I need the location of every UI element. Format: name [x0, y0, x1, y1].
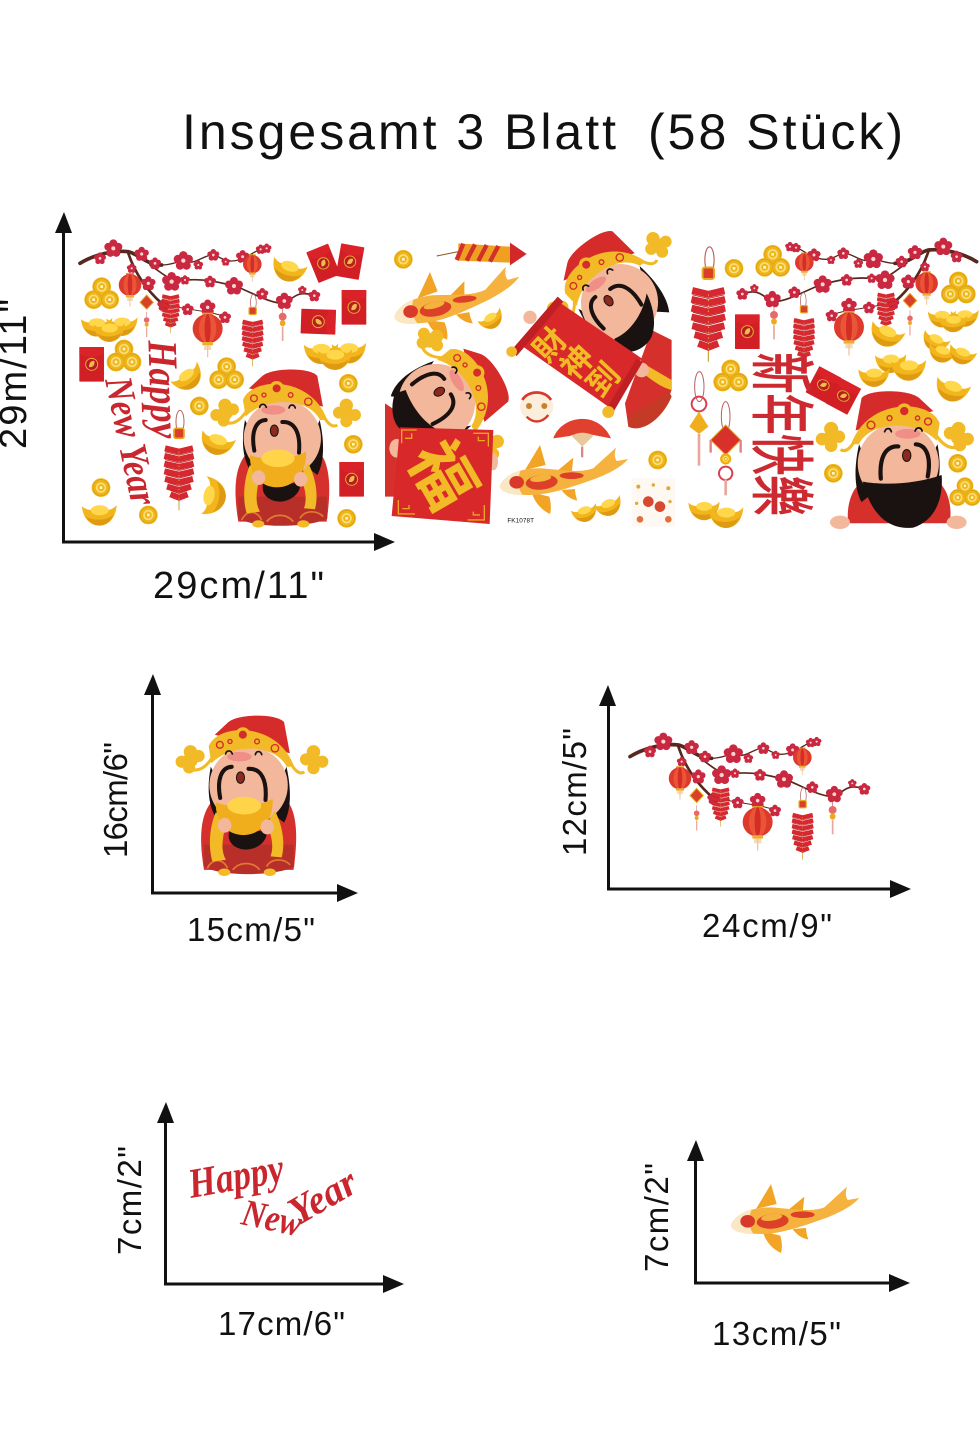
- scroll 財神到: [506, 297, 642, 418]
- ingots: [688, 310, 979, 528]
- panel: sheet 1: [79, 239, 366, 528]
- panel: sheet 2: [367, 201, 706, 527]
- lettering: New: [237, 1192, 306, 1245]
- scroll 財神到: 到: [579, 356, 627, 404]
- Happy New Year lettering: New Year: [96, 372, 166, 510]
- gold ingots: [81, 256, 366, 526]
- god of wealth holding scroll: [506, 201, 706, 428]
- axes: [157, 1102, 404, 1293]
- red envelopes: [79, 243, 366, 497]
- fu sign: 福: [394, 429, 490, 521]
- scroll 財神到: 財: [526, 321, 574, 369]
- lettering: Happy: [184, 1146, 288, 1208]
- title: (58 Stück): [648, 104, 903, 160]
- height label: 7cm/2": [638, 1163, 675, 1272]
- lettering: [184, 1146, 365, 1245]
- axes: [599, 685, 911, 898]
- god figure: [176, 716, 328, 876]
- sticker size: happy new year: [111, 1102, 404, 1342]
- scroll 財神到: 神: [554, 338, 602, 386]
- title: Insgesamt 3 Blatt: [182, 104, 616, 160]
- koi fish top: [390, 263, 525, 345]
- koi fish bottom: [500, 445, 628, 514]
- god of wealth with beard: [816, 391, 974, 529]
- axes: [687, 1140, 910, 1292]
- coins: [713, 245, 980, 506]
- width label: 13cm/5": [712, 1315, 841, 1352]
- lettering: Year: [280, 1159, 365, 1234]
- coins: [394, 250, 667, 469]
- width label 29cm/11": 29cm/11": [153, 565, 324, 607]
- branch: [630, 733, 870, 860]
- firecracker: [691, 247, 725, 362]
- Chinese new year lettering: 新年快樂: [744, 353, 815, 516]
- god of wealth holding fu sign: [367, 306, 536, 524]
- koi: [731, 1184, 859, 1253]
- panel: sheet 3: [688, 238, 980, 529]
- sticker size: god of wealth: [97, 674, 358, 948]
- firecrackers: [164, 410, 194, 510]
- mirrored blossom branch: [736, 238, 977, 365]
- height label: 7cm/2": [111, 1146, 148, 1255]
- mini sticker sheet thumbnail: [632, 478, 675, 527]
- title: [182, 104, 903, 160]
- Happy New Year lettering: Happy: [138, 339, 188, 440]
- height label: 12cm/5": [556, 728, 593, 856]
- red envelopes: [735, 314, 861, 415]
- folding fan: [553, 419, 611, 457]
- height label: 16cm/6": [97, 742, 134, 858]
- width label: 24cm/9": [702, 907, 832, 944]
- hanging knot ornaments: [689, 372, 741, 495]
- main size axes: [55, 212, 395, 551]
- lion head: [520, 391, 553, 422]
- ingots: [477, 307, 625, 525]
- Happy New Year lettering: [96, 339, 188, 510]
- sticker size: koi fish: [638, 1140, 910, 1352]
- width label: 17cm/6": [218, 1305, 345, 1342]
- product code: FK1078T: [507, 518, 534, 525]
- god of wealth: [210, 369, 361, 528]
- rocket firework: [437, 243, 527, 265]
- blossom branch: [80, 239, 320, 366]
- width label: 15cm/5": [187, 911, 315, 948]
- sticker size: blossom branch: [556, 685, 911, 944]
- gold coins: [84, 277, 363, 528]
- axes: [144, 674, 358, 902]
